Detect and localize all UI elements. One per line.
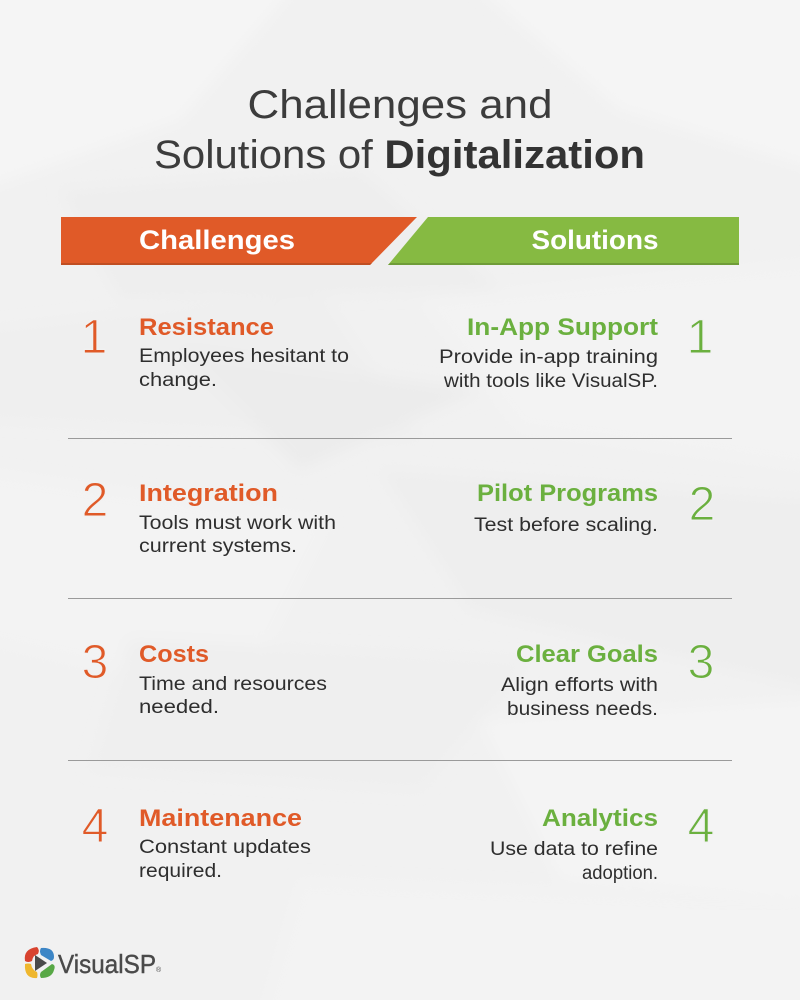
- row 4: challenge: Maintenance: [139, 805, 302, 832]
- row 3: challenge: 3: [82, 636, 108, 689]
- logo: VisualSP: VisualSP: [58, 949, 156, 979]
- row 3: challenge: Time and resources: [139, 674, 327, 695]
- row 1: challenge: [81, 311, 349, 391]
- logo: VisualSP: ®: [156, 966, 162, 974]
- row 1: solution: with tools like VisualSP.: [443, 371, 658, 392]
- row 1: solution: 1: [687, 311, 713, 364]
- row 1: challenge: 1: [81, 311, 107, 364]
- row 1: solution: [439, 311, 713, 392]
- row 4: solution: adoption.: [582, 863, 658, 884]
- icon: logo mark: [25, 947, 55, 978]
- row 4: solution: [490, 800, 714, 884]
- row 1: challenge: Resistance: [139, 314, 274, 341]
- row 4: solution: Use data to refine: [490, 839, 658, 860]
- row 1: challenge: change.: [139, 370, 217, 391]
- row 2: challenge: current systems.: [139, 536, 297, 557]
- row 1: solution: Provide in-app training: [439, 347, 658, 368]
- row 3: challenge: [82, 636, 327, 718]
- row 1: challenge: Employees hesitant to: [139, 346, 349, 367]
- row 3: solution: Align efforts with: [501, 675, 658, 696]
- header banner: challenges: Challenges: [139, 225, 295, 255]
- row 4: solution: Analytics: [542, 805, 658, 832]
- row 1: solution: In-App Support: [467, 314, 658, 341]
- row 3: solution: 3: [688, 636, 714, 689]
- header banner: solutions: Solutions: [532, 225, 658, 255]
- row 4: solution: 4: [688, 800, 714, 853]
- row 2: challenge: Integration: [139, 480, 278, 507]
- row 2: solution: [474, 478, 715, 536]
- row 3: solution: [501, 636, 714, 720]
- row 3: challenge: Costs: [139, 641, 209, 668]
- row 3: solution: business needs.: [507, 699, 658, 720]
- header banner: challenges: [61, 217, 417, 265]
- row 2: solution: Test before scaling.: [474, 515, 658, 536]
- row 2: challenge: Tools must work with: [139, 513, 336, 534]
- row 4: challenge: required.: [139, 861, 222, 882]
- row 2: solution: 2: [689, 478, 715, 531]
- row 3: challenge: needed.: [139, 697, 219, 718]
- row 4: challenge: 4: [82, 800, 108, 853]
- title: Solutions of Digitalization: [154, 133, 645, 177]
- row 2: challenge: 2: [82, 474, 108, 527]
- row 2: challenge: [82, 474, 336, 557]
- row 2: solution: Pilot Programs: [477, 480, 658, 507]
- header banner: solutions: [388, 217, 739, 265]
- row 4: challenge: [82, 800, 311, 882]
- title: [154, 83, 645, 177]
- title: Challenges and: [248, 83, 552, 127]
- row 3: solution: Clear Goals: [516, 641, 658, 668]
- row 4: challenge: Constant updates: [139, 837, 311, 858]
